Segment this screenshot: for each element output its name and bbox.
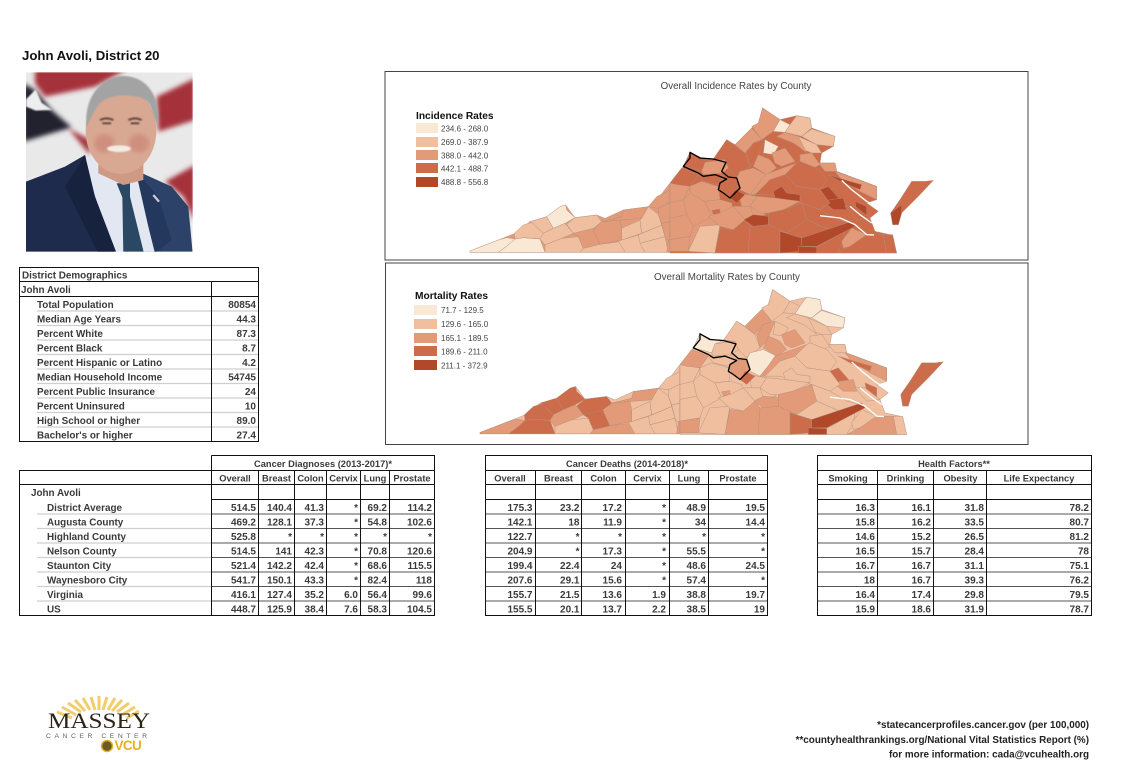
- table: cancer diagnoses 2013-2017: Virginia: [47, 590, 84, 601]
- table: cancer diagnoses 2013-2017: Waynesboro City: [47, 576, 128, 586]
- table: health factors: 15.9: [856, 604, 875, 616]
- table: cancer deaths 2014-2018: Overall: [494, 474, 526, 484]
- legend: incidence rates: 442.1 - 488.7: [441, 164, 489, 174]
- table: cancer diagnoses 2013-2017: 56.4: [368, 590, 387, 601]
- table: health factors: 16.7: [856, 561, 875, 572]
- table: cancer deaths 2014-2018: 24.5: [746, 561, 765, 572]
- table: health factors: 39.3: [965, 576, 984, 586]
- table: health factors: 26.5: [965, 532, 984, 543]
- table: district demographics: 54745: [228, 372, 256, 384]
- table: cancer diagnoses 2013-2017: 104.5: [407, 604, 432, 616]
- legend: mortality rates: 165.1 - 189.5: [441, 334, 489, 343]
- table: health factors: 31.1: [965, 561, 984, 572]
- table: cancer deaths 2014-2018: *: [662, 518, 666, 528]
- table: cancer diagnoses 2013-2017: 37.3: [305, 518, 324, 528]
- table: cancer diagnoses 2013-2017: 141: [275, 546, 292, 558]
- table: cancer diagnoses 2013-2017: *: [354, 546, 358, 558]
- table: cancer diagnoses 2013-2017: Augusta County: [47, 518, 124, 528]
- table: cancer deaths 2014-2018: 17.3: [603, 546, 622, 558]
- table: cancer deaths 2014-2018: *: [761, 576, 765, 586]
- table: cancer diagnoses 2013-2017: *: [320, 532, 324, 543]
- legend: mortality rates: Mortality Rates: [415, 291, 488, 302]
- table: district demographics: 80854: [228, 300, 256, 311]
- table: health factors: [817, 456, 1092, 616]
- table: cancer deaths 2014-2018: 29.1: [560, 576, 580, 586]
- table: cancer deaths 2014-2018: *: [662, 503, 666, 514]
- table: cancer diagnoses 2013-2017: 35.2: [305, 590, 324, 601]
- table: cancer diagnoses 2013-2017: 42.3: [305, 546, 324, 558]
- table: cancer diagnoses 2013-2017: 115.5: [408, 561, 432, 572]
- logo: Massey Cancer Center VCU: [46, 696, 150, 753]
- legend: mortality rates: 71.7 - 129.5: [441, 306, 484, 315]
- table: health factors: Drinking: [887, 474, 925, 484]
- table: cancer deaths 2014-2018: 17.2: [603, 503, 622, 514]
- map panel: incidence rates: [385, 72, 1028, 260]
- logo: Massey Cancer Center VCU: CANCER CENTER: [46, 733, 147, 740]
- table: cancer deaths 2014-2018: *: [662, 561, 666, 572]
- table: cancer deaths 2014-2018: *: [702, 532, 706, 543]
- table: health factors: 16.7: [912, 576, 931, 586]
- table: cancer diagnoses 2013-2017: 41.3: [305, 503, 324, 514]
- district outline: [693, 334, 750, 379]
- table: cancer deaths 2014-2018: 19.7: [746, 590, 765, 601]
- table: cancer diagnoses 2013-2017: 541.7: [231, 576, 256, 586]
- table: district demographics: Total Population: [37, 300, 114, 311]
- table: health factors: 31.9: [965, 604, 984, 616]
- table: cancer diagnoses 2013-2017: 70.8: [368, 546, 387, 558]
- legend: incidence rates: 269.0 - 387.9: [441, 138, 489, 147]
- table: cancer deaths 2014-2018: *: [761, 532, 765, 543]
- table: cancer diagnoses 2013-2017: Prostate: [393, 474, 431, 484]
- table: cancer diagnoses 2013-2017: 102.6: [407, 518, 432, 528]
- table: cancer diagnoses 2013-2017: 514.5: [231, 503, 256, 514]
- table: cancer diagnoses 2013-2017: *: [354, 532, 358, 543]
- table: cancer deaths 2014-2018: 199.4: [507, 561, 533, 572]
- map title: incidence: Overall Incidence Rates by County: [661, 81, 812, 92]
- table: cancer diagnoses 2013-2017: US: [47, 604, 61, 616]
- legend: incidence rates: 234.6 - 268.0: [441, 124, 489, 134]
- table: health factors: 33.5: [965, 518, 984, 528]
- choropleth map: incidence by county: [470, 108, 933, 253]
- table: cancer deaths 2014-2018: 13.6: [603, 590, 622, 601]
- table: cancer deaths 2014-2018: 55.5: [687, 546, 706, 558]
- table: district demographics: 87.3: [237, 329, 256, 340]
- portrait photo: [23, 68, 195, 253]
- table: cancer diagnoses 2013-2017: *: [354, 518, 358, 528]
- legend: mortality rates: [414, 291, 489, 370]
- table: cancer deaths 2014-2018: 21.5: [560, 590, 580, 601]
- table: cancer deaths 2014-2018: 38.5: [687, 604, 706, 616]
- table: cancer diagnoses 2013-2017: John Avoli: [31, 488, 81, 499]
- table: cancer diagnoses 2013-2017: Breast: [262, 474, 291, 484]
- table: health factors: 16.2: [912, 518, 931, 528]
- map panel: mortality rates: [386, 263, 1028, 444]
- table: cancer diagnoses 2013-2017: Staunton City: [47, 561, 112, 572]
- table: cancer diagnoses 2013-2017: 43.3: [305, 576, 324, 586]
- table: cancer diagnoses 2013-2017: 142.2: [267, 561, 292, 572]
- table: health factors: 28.4: [965, 546, 984, 558]
- logo: Massey Cancer Center VCU: MASSEY: [48, 708, 150, 733]
- table: cancer diagnoses 2013-2017: *: [354, 503, 358, 514]
- table: cancer diagnoses 2013-2017: 416.1: [231, 590, 256, 601]
- table: health factors: 18.6: [912, 604, 931, 616]
- table: cancer diagnoses 2013-2017: 125.9: [267, 604, 292, 616]
- table: cancer deaths 2014-2018: 15.6: [603, 576, 622, 586]
- table: cancer diagnoses 2013-2017: District Average: [47, 503, 123, 514]
- table: cancer deaths 2014-2018: 57.4: [687, 576, 706, 586]
- table: health factors: 78: [1078, 546, 1089, 558]
- table: health factors: 16.7: [912, 561, 931, 572]
- table: district demographics: 24: [245, 387, 256, 398]
- choropleth map: mortality by county: [480, 289, 943, 434]
- table: health factors: 29.8: [965, 590, 984, 601]
- icon: VCU seal: [102, 740, 112, 752]
- table: cancer diagnoses 2013-2017: 120.6: [407, 546, 432, 558]
- table: cancer deaths 2014-2018: 48.6: [687, 561, 706, 572]
- table: district demographics: Median Household Income: [37, 372, 163, 384]
- table: cancer deaths 2014-2018: Cervix: [633, 474, 663, 484]
- table: cancer deaths 2014-2018: [485, 456, 768, 616]
- table: cancer deaths 2014-2018: 204.9: [507, 546, 533, 558]
- title: John Avoli, District 20: [22, 48, 160, 63]
- footnotes and sources: [796, 720, 1089, 760]
- table: district demographics: Percent Uninsured: [37, 402, 125, 412]
- table: district demographics: Percent Hispanic or Latino: [37, 358, 162, 369]
- table: health factors: 79.5: [1070, 590, 1089, 601]
- table: cancer diagnoses 2013-2017: 42.4: [305, 561, 324, 572]
- table: health factors: Obesity: [943, 474, 978, 484]
- table: cancer deaths 2014-2018: 142.1: [507, 518, 533, 528]
- table: cancer diagnoses 2013-2017: 7.6: [344, 604, 358, 616]
- table: cancer diagnoses 2013-2017: *: [288, 532, 292, 543]
- logo: Massey Cancer Center VCU: VCU: [114, 738, 141, 753]
- table: cancer diagnoses 2013-2017: 58.3: [368, 604, 387, 616]
- table: health factors: 16.4: [856, 590, 875, 601]
- table: health factors: 80.7: [1070, 518, 1089, 528]
- table: cancer diagnoses 2013-2017: 54.8: [368, 518, 387, 528]
- table: cancer deaths 2014-2018: 22.4: [560, 561, 580, 572]
- table: cancer deaths 2014-2018: 48.9: [687, 503, 706, 514]
- table: district demographics: District Demographics: [22, 270, 128, 282]
- table: cancer deaths 2014-2018: Breast: [544, 474, 573, 484]
- icon: sun rays: [57, 696, 139, 718]
- table: cancer diagnoses 2013-2017: 514.5: [231, 546, 256, 558]
- table: district demographics: 44.3: [237, 314, 256, 326]
- table: cancer deaths 2014-2018: 20.1: [560, 604, 580, 616]
- table: cancer diagnoses 2013-2017: Cervix: [329, 474, 359, 484]
- table: cancer deaths 2014-2018: 155.7: [507, 590, 533, 601]
- table: cancer diagnoses 2013-2017: *: [354, 576, 358, 586]
- table: health factors: 15.2: [912, 532, 931, 543]
- table: cancer diagnoses 2013-2017: *: [354, 561, 358, 572]
- table: health factors: 81.2: [1070, 532, 1089, 543]
- table: cancer diagnoses 2013-2017: Overall: [219, 474, 251, 484]
- legend: incidence rates: 488.8 - 556.8: [441, 178, 489, 187]
- table: cancer diagnoses 2013-2017: 38.4: [305, 604, 324, 616]
- table: cancer diagnoses 2013-2017: 140.4: [267, 503, 292, 514]
- table: health factors: Life Expectancy: [1004, 474, 1075, 484]
- legend: incidence rates: Incidence Rates: [416, 111, 494, 122]
- table: cancer deaths 2014-2018: Cancer Deaths (2014-2018)*: [566, 459, 688, 469]
- table: health factors: Smoking: [828, 474, 868, 484]
- table: district demographics: 10: [245, 402, 256, 412]
- table: cancer diagnoses 2013-2017: 114.2: [408, 503, 432, 514]
- table: health factors: 78.7: [1070, 604, 1089, 616]
- table: cancer deaths 2014-2018: *: [662, 546, 666, 558]
- table: cancer deaths 2014-2018: 19: [754, 604, 765, 616]
- table: cancer deaths 2014-2018: Lung: [678, 474, 701, 484]
- table: district demographics: Bachelor's or higher: [37, 430, 133, 442]
- table: cancer diagnoses 2013-2017: 127.4: [267, 590, 292, 601]
- table: health factors: 76.2: [1070, 576, 1089, 586]
- table: cancer deaths 2014-2018: 11.9: [603, 518, 622, 528]
- map title: mortality: Overall Mortality Rates by County: [654, 272, 800, 283]
- table: cancer deaths 2014-2018: Colon: [590, 474, 617, 484]
- table: health factors: 16.1: [912, 503, 931, 514]
- table: health factors: 16.3: [856, 503, 875, 514]
- table: health factors: 31.8: [965, 503, 984, 514]
- legend: incidence rates: [416, 111, 494, 187]
- table: cancer diagnoses 2013-2017: 69.2: [368, 503, 387, 514]
- table: cancer diagnoses 2013-2017: 118: [416, 576, 432, 586]
- table: district demographics: High School or higher: [37, 416, 140, 427]
- table: cancer diagnoses 2013-2017: 6.0: [344, 590, 358, 601]
- table: district demographics: John Avoli: [21, 285, 71, 296]
- table: cancer diagnoses 2013-2017: Colon: [297, 474, 324, 484]
- legend: incidence rates: 388.0 - 442.0: [441, 152, 489, 160]
- table: cancer diagnoses 2013-2017: [20, 456, 434, 616]
- table: health factors: 14.6: [856, 532, 875, 543]
- table: cancer deaths 2014-2018: 14.4: [746, 518, 765, 528]
- legend: mortality rates: 129.6 - 165.0: [441, 320, 489, 329]
- table: cancer deaths 2014-2018: 24: [611, 561, 622, 572]
- table: health factors: 15.7: [912, 546, 931, 558]
- table: health factors: 78.2: [1070, 503, 1089, 514]
- table: cancer deaths 2014-2018: Prostate: [719, 474, 757, 484]
- legend: mortality rates: 211.1 - 372.9: [441, 362, 488, 370]
- table: cancer deaths 2014-2018: *: [662, 532, 666, 543]
- footnotes and sources: **countyhealthrankings.org/National Vital Statistics Report (%): [796, 735, 1089, 746]
- table: cancer diagnoses 2013-2017: Nelson County: [47, 546, 117, 558]
- table: cancer deaths 2014-2018: 1.9: [652, 590, 666, 601]
- table: district demographics: 89.0: [237, 416, 256, 427]
- table: cancer deaths 2014-2018: 207.6: [507, 576, 533, 586]
- table: district demographics: Median Age Years: [37, 314, 121, 326]
- table: cancer deaths 2014-2018: *: [662, 576, 666, 586]
- footnotes and sources: *statecancerprofiles.cancer.gov (per 100,000): [877, 720, 1089, 731]
- table: cancer diagnoses 2013-2017: 525.8: [231, 532, 256, 543]
- table: cancer deaths 2014-2018: 19.5: [746, 503, 765, 514]
- table: cancer deaths 2014-2018: 18: [568, 518, 580, 528]
- table: cancer deaths 2014-2018: *: [576, 546, 580, 558]
- legend: mortality rates: 189.6 - 211.0: [441, 348, 488, 356]
- table: cancer deaths 2014-2018: 122.7: [507, 532, 533, 543]
- table: health factors: 75.1: [1070, 561, 1089, 572]
- footnotes and sources: for more information: cada@vcuhealth.org: [889, 750, 1089, 760]
- table: district demographics: Percent Black: [37, 344, 103, 354]
- table: cancer deaths 2014-2018: 2.2: [652, 604, 666, 616]
- table: cancer deaths 2014-2018: *: [761, 546, 765, 558]
- table: cancer deaths 2014-2018: *: [576, 532, 580, 543]
- table: cancer diagnoses 2013-2017: Cancer Diagnoses (2013-2017)*: [254, 459, 392, 469]
- table: cancer diagnoses 2013-2017: 521.4: [231, 561, 256, 572]
- table: health factors: 18: [864, 576, 875, 586]
- table: cancer diagnoses 2013-2017: 128.1: [267, 518, 292, 528]
- table: health factors: 15.8: [856, 518, 875, 528]
- table: cancer deaths 2014-2018: *: [618, 532, 622, 543]
- table: cancer deaths 2014-2018: 23.2: [560, 503, 580, 514]
- table: cancer diagnoses 2013-2017: *: [428, 532, 432, 543]
- table: cancer deaths 2014-2018: 175.3: [507, 503, 533, 514]
- table: cancer diagnoses 2013-2017: 68.6: [368, 561, 387, 572]
- table: cancer diagnoses 2013-2017: 469.2: [231, 518, 256, 528]
- table: cancer diagnoses 2013-2017: 99.6: [413, 590, 432, 601]
- table: district demographics: Percent Public Insurance: [37, 387, 156, 398]
- table: health factors: 17.4: [912, 590, 931, 601]
- table: cancer diagnoses 2013-2017: 448.7: [231, 604, 256, 616]
- table: district demographics: 4.2: [242, 358, 256, 369]
- table: cancer diagnoses 2013-2017: Highland County: [47, 532, 126, 543]
- table: district demographics: 8.7: [242, 344, 256, 354]
- table: cancer diagnoses 2013-2017: Lung: [364, 474, 387, 484]
- table: cancer diagnoses 2013-2017: 150.1: [267, 576, 292, 586]
- table: health factors: Health Factors**: [918, 459, 990, 469]
- district outline: [683, 152, 740, 198]
- table: cancer diagnoses 2013-2017: 82.4: [368, 576, 387, 586]
- table: cancer deaths 2014-2018: 34: [695, 518, 706, 528]
- table: cancer deaths 2014-2018: 155.5: [507, 604, 533, 616]
- table: cancer deaths 2014-2018: 38.8: [687, 590, 706, 601]
- table: district demographics: 27.4: [237, 430, 256, 442]
- table: health factors: 16.5: [856, 546, 875, 558]
- table: cancer deaths 2014-2018: 13.7: [603, 604, 622, 616]
- table: district demographics: [20, 268, 258, 442]
- table: cancer diagnoses 2013-2017: *: [383, 532, 387, 543]
- table: district demographics: Percent White: [37, 329, 103, 340]
